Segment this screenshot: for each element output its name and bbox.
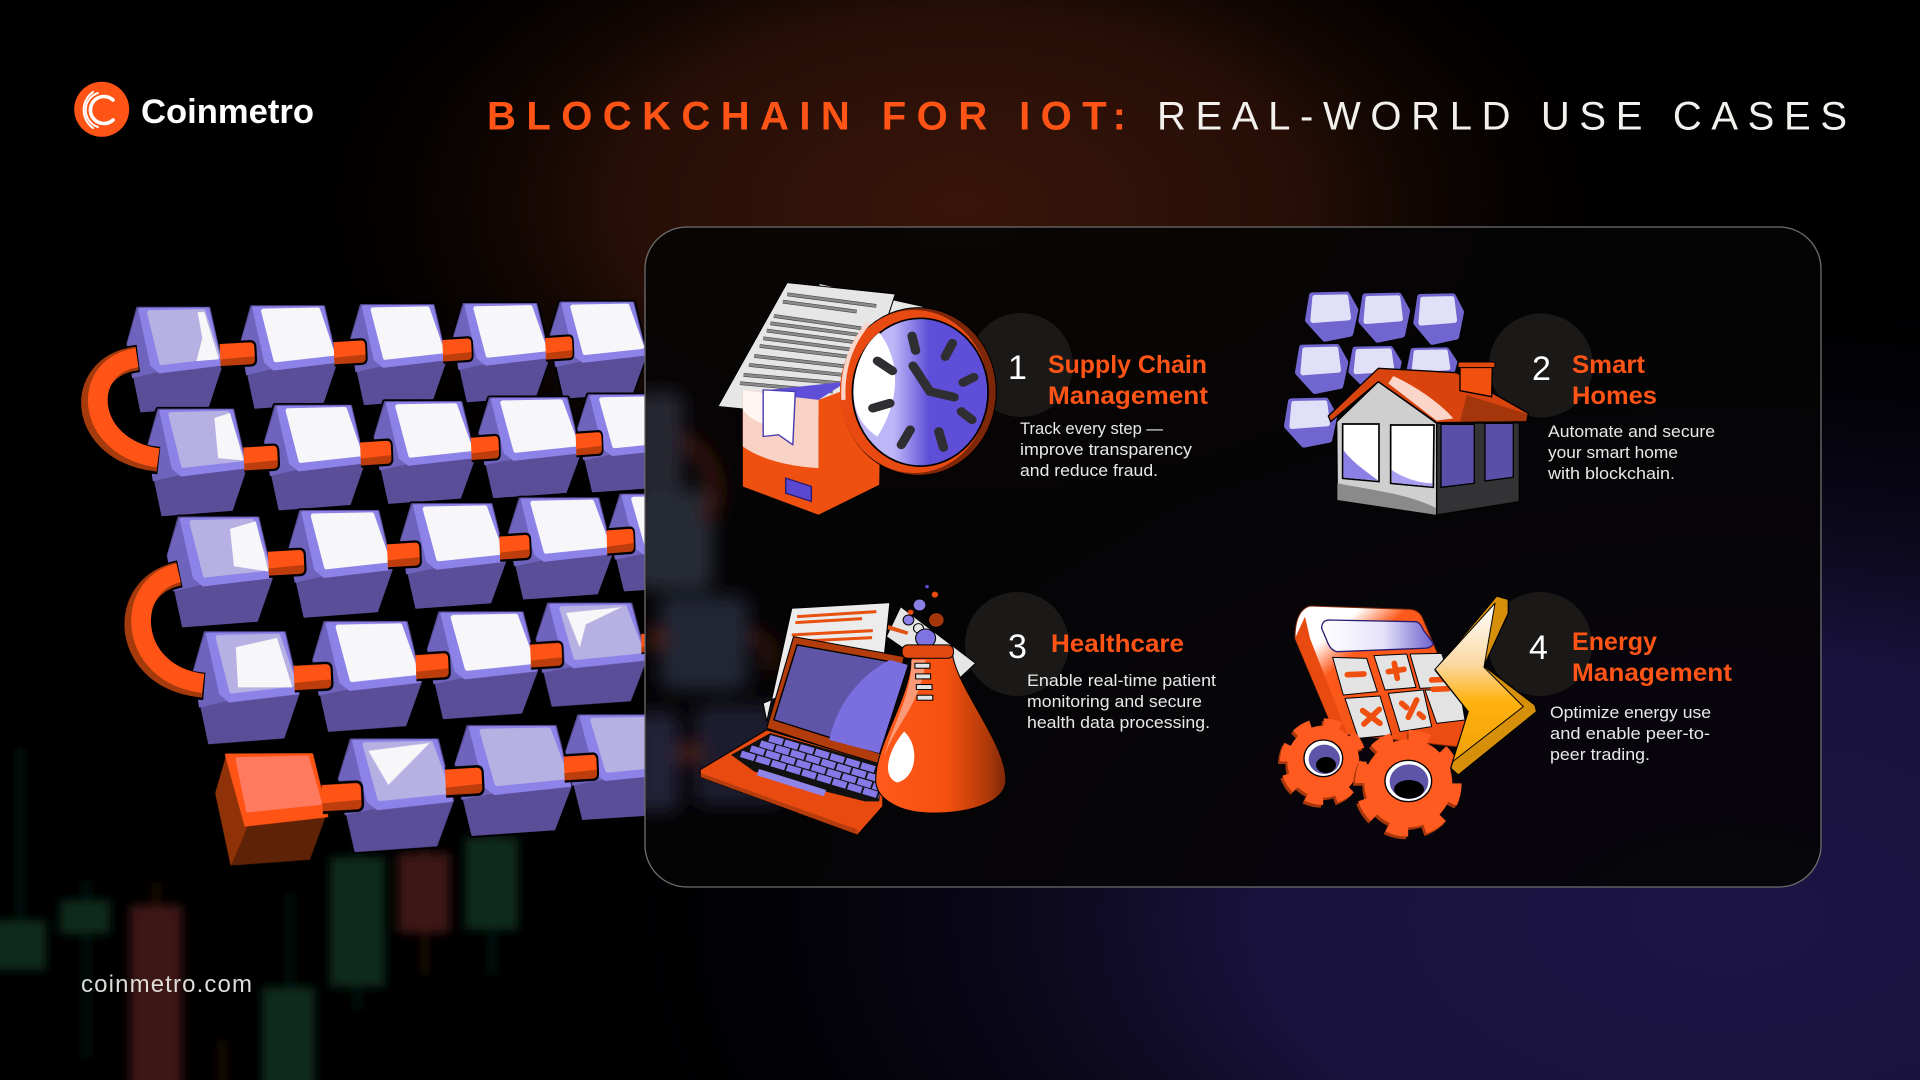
footer website: coinmetro.com	[81, 971, 252, 998]
number 4: 4	[1529, 629, 1548, 667]
blockchain cube chain	[92, 302, 713, 867]
panel: use cases	[635, 227, 1821, 887]
heading: supply chain management: Management	[1048, 382, 1209, 410]
number badge 4	[1488, 592, 1592, 696]
text: healthcare description: Enable real-time patient	[1027, 671, 1216, 690]
heading: energy management	[1572, 628, 1733, 687]
number badge 3	[965, 592, 1069, 696]
text: energy management description: Optimize energy use	[1550, 703, 1711, 722]
text: healthcare description	[1027, 671, 1216, 732]
title	[487, 94, 1847, 138]
blurred cubes behind panel	[635, 392, 785, 811]
text: energy management description: and enable peer-to-	[1550, 724, 1710, 743]
text: supply chain description: and reduce fraud.	[1020, 461, 1158, 480]
row 2 cubes	[148, 395, 680, 516]
curved link upper	[92, 358, 159, 461]
row 5 cubes	[214, 715, 682, 867]
text: supply chain description: Track every step —	[1020, 419, 1163, 438]
card 2: smart homes	[1287, 295, 1715, 515]
text: healthcare description: health data processing.	[1027, 713, 1210, 732]
title: BLOCKCHAIN FOR IOT:	[487, 94, 1126, 138]
text: smart homes description: Automate and secure	[1548, 422, 1715, 441]
card 1: supply chain	[718, 283, 1209, 515]
row 1 cubes	[127, 302, 646, 412]
curved link lower	[136, 573, 204, 686]
logo wordmark: Coinmetro	[141, 93, 314, 131]
number badge 2	[1489, 314, 1593, 418]
number 1: 1	[1008, 349, 1027, 387]
number 2: 2	[1532, 350, 1551, 388]
heading: smart homes	[1572, 351, 1657, 410]
icon: house with cubes	[1287, 295, 1528, 515]
heading: smart homes: Smart	[1572, 351, 1646, 379]
icon: laptop and flask	[700, 585, 1006, 835]
icon: document, box and clock	[718, 283, 996, 515]
text: smart homes description: with blockchain.	[1547, 464, 1675, 483]
card 3: healthcare	[700, 585, 1216, 835]
text: energy management description	[1550, 703, 1711, 764]
title: REAL-WORLD USE CASES	[1157, 94, 1847, 138]
text: healthcare description: monitoring and secure	[1027, 692, 1202, 711]
text: smart homes description	[1547, 422, 1715, 483]
text: energy management description: peer trading.	[1550, 745, 1650, 764]
text: supply chain description	[1020, 419, 1193, 480]
orange connectors	[220, 335, 657, 813]
heading: supply chain management: Supply Chain	[1048, 351, 1207, 379]
text: smart homes description: your smart home	[1548, 443, 1678, 462]
heading: energy management: Energy	[1572, 628, 1657, 656]
heading: energy management: Management	[1572, 659, 1733, 687]
heading: supply chain management	[1048, 351, 1209, 410]
logo	[74, 82, 314, 137]
icon: calculator, gears and bolt	[1284, 596, 1537, 832]
card 4: energy management	[1284, 592, 1733, 832]
number badge 1	[969, 313, 1073, 417]
row 3 cubes	[166, 494, 644, 628]
blurred candlestick chart	[0, 747, 518, 1080]
heading: healthcare: Healthcare	[1051, 630, 1184, 658]
logo mark	[74, 82, 129, 137]
heading: smart homes: Homes	[1572, 382, 1657, 410]
number 3: 3	[1008, 628, 1027, 666]
text: supply chain description: improve transparency	[1020, 440, 1193, 459]
row 4 cubes	[194, 603, 646, 743]
